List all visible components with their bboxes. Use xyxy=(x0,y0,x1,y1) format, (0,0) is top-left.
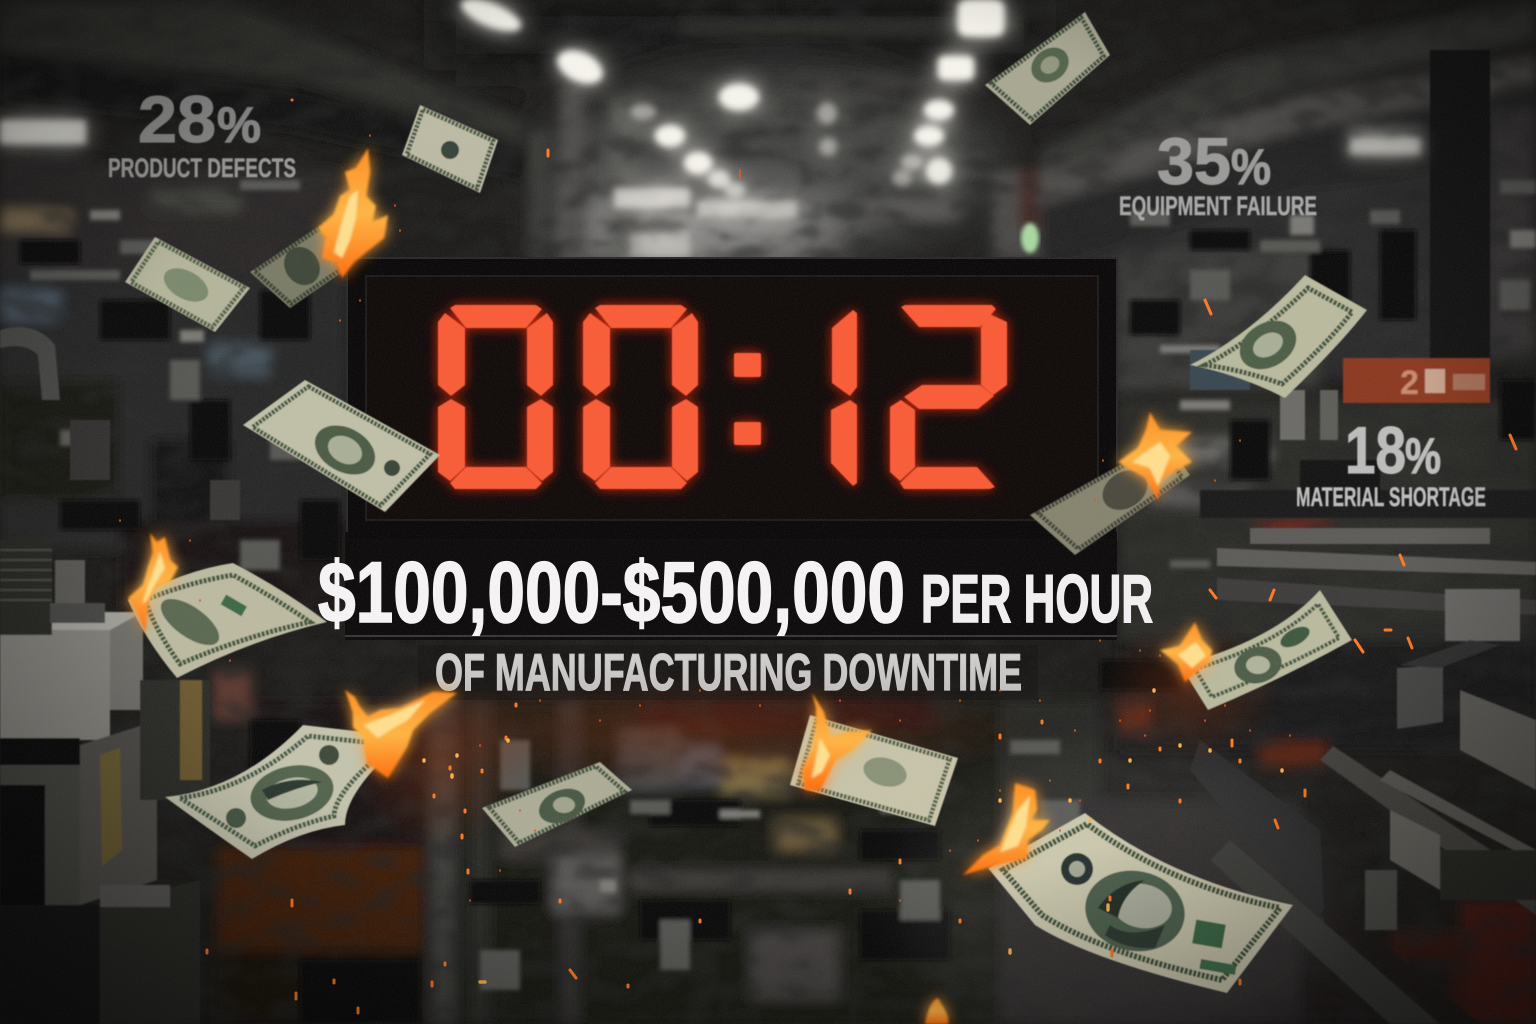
flame: bottom edge xyxy=(925,998,948,1024)
stat: material shortage: 18 xyxy=(1345,413,1406,487)
flames xyxy=(128,148,1212,1024)
bottom-left machine blocks xyxy=(0,630,110,740)
bill: mid left burning xyxy=(128,563,327,678)
bill: right of timer burning xyxy=(1030,440,1190,555)
red factory sign: 2 xyxy=(1400,364,1419,402)
flame: lower left bill xyxy=(345,690,457,778)
ceiling lights xyxy=(0,0,1420,258)
stat: product defects: % xyxy=(217,97,261,153)
bill: left xyxy=(125,237,250,332)
bill: beside timer left xyxy=(243,380,440,512)
flame: top left bill xyxy=(318,148,388,278)
stat: material shortage: % xyxy=(1405,428,1441,484)
headline band xyxy=(345,532,1117,700)
digit 0 xyxy=(583,305,698,489)
bill: lower left burning xyxy=(165,725,408,859)
bill: lower right burning xyxy=(1180,590,1352,710)
bill: upper right xyxy=(1190,275,1367,398)
headline: cost range: $100,000-$500,000 xyxy=(318,545,905,641)
flame: bottom center bill xyxy=(802,693,872,790)
red factory sign xyxy=(1343,358,1490,403)
flame: right of timer bill xyxy=(1118,412,1192,500)
digit 2 xyxy=(890,305,1007,489)
flame: lower right bill xyxy=(1160,622,1212,682)
stat: equipment failure: % xyxy=(1231,139,1271,195)
bill: bottom center small xyxy=(482,762,632,847)
colon xyxy=(734,353,761,445)
flame: mid left bill xyxy=(128,533,178,633)
bill: upper left small xyxy=(402,105,498,193)
right conveyor lines xyxy=(1217,548,1536,575)
digital countdown 00:12 xyxy=(438,305,1007,489)
digit 0 xyxy=(438,305,553,489)
haze and embers xyxy=(350,620,1340,1024)
stat: equipment failure: EQUIPMENT FAILURE xyxy=(1119,191,1317,221)
timer panel xyxy=(347,258,1117,540)
headline: per hour: PER HOUR xyxy=(921,561,1153,637)
digit 1 xyxy=(831,310,857,486)
bill: burning near timer xyxy=(250,222,345,308)
flame: large bill xyxy=(963,783,1050,875)
subheadline: OF MANUFACTURING DOWNTIME xyxy=(435,644,1022,702)
bill: top right xyxy=(985,12,1110,125)
stat: equipment failure: 35 xyxy=(1157,124,1231,198)
bill: large bottom right xyxy=(988,813,1293,993)
stat: product defects: PRODUCT DEFECTS xyxy=(108,153,296,183)
bill: bottom center burning xyxy=(790,715,958,826)
stat: product defects: 28 xyxy=(138,82,216,156)
stat: material shortage xyxy=(1296,413,1486,512)
stat: equipment failure xyxy=(1119,124,1317,221)
stat: product defects xyxy=(108,82,296,183)
left machine details xyxy=(0,327,60,400)
